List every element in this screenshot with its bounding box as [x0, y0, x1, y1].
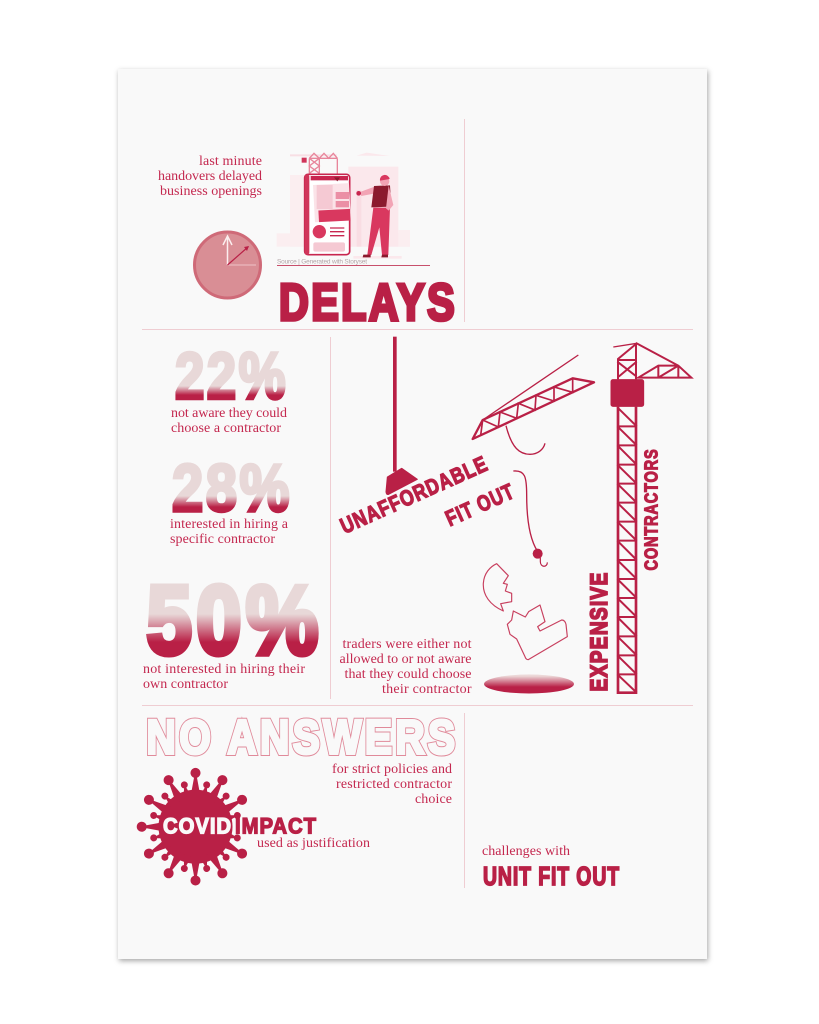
- caption: source: Source | Generated with Storyset: [277, 258, 367, 266]
- text: COVID: COVID: [163, 814, 232, 838]
- text: last minute handovers: [158, 154, 262, 199]
- text: 22% description: choose a contractor: [171, 421, 281, 436]
- text: strict policies: for strict policies and: [332, 762, 452, 777]
- text: 22% description: [171, 406, 287, 436]
- text: last minute handovers: business openings: [160, 184, 262, 199]
- text: 28% description: [170, 517, 289, 547]
- icon: tower crane: [611, 343, 691, 693]
- text: used as justification: used as justification: [257, 836, 370, 851]
- icon: clock: [194, 232, 260, 298]
- icon: hammer: [386, 337, 417, 494]
- text: traders description: [340, 637, 472, 697]
- heading: NO ANSWERS: NO ANSWERS: [146, 712, 458, 764]
- text: last minute handovers: last minute: [199, 154, 262, 169]
- text: 28% description: interested in hiring a: [170, 517, 289, 532]
- icon: ground shadow: [484, 674, 574, 694]
- text: FIT OUT: FIT OUT: [442, 478, 518, 531]
- text: 22% description: not aware they could: [171, 406, 287, 421]
- text: challenges with: challenges with: [482, 844, 570, 859]
- heading: UNIT FIT OUT: UNIT FIT OUT: [483, 861, 620, 891]
- text: EXPENSIVE: EXPENSIVE: [586, 572, 613, 692]
- stat: 28%: 28%: [172, 451, 292, 526]
- text: UNAFFORDABLE: UNAFFORDABLE: [336, 451, 492, 539]
- text: CONTRACTORS: CONTRACTORS: [642, 448, 662, 570]
- heading: NO ANSWERS: NO ANSWERS: [146, 712, 458, 764]
- illustration: worker and phone under construction: [277, 153, 410, 257]
- text: traders description: traders were either not: [342, 637, 472, 652]
- icon: crane cable and hook: [513, 471, 547, 566]
- icon: virus: [137, 768, 249, 885]
- text: traders description: that they could choose: [344, 667, 472, 682]
- text: strict policies: restricted contractor: [336, 777, 452, 792]
- icon: broken crane jib: [473, 355, 594, 454]
- stat: 50%: 50%: [146, 566, 322, 674]
- heading: DELAYS: DELAYS: [279, 274, 457, 332]
- stat: 22%: 22%: [175, 339, 288, 413]
- text: 28% description: specific contractor: [170, 532, 275, 547]
- text: IMPACT: IMPACT: [235, 814, 317, 838]
- text: strict policies: [332, 762, 452, 807]
- poster panel: [118, 69, 707, 959]
- text: 50% description: [143, 662, 305, 692]
- text: strict policies: choice: [415, 792, 452, 807]
- icon: broken pieces outline: [483, 564, 567, 660]
- text: traders description: their contractor: [382, 682, 472, 697]
- text: traders description: allowed to or not aware: [340, 652, 472, 667]
- text: 50% description: own contractor: [143, 677, 228, 692]
- text: 50% description: not interested in hiring their: [143, 662, 305, 677]
- text: last minute handovers: handovers delayed: [158, 169, 262, 184]
